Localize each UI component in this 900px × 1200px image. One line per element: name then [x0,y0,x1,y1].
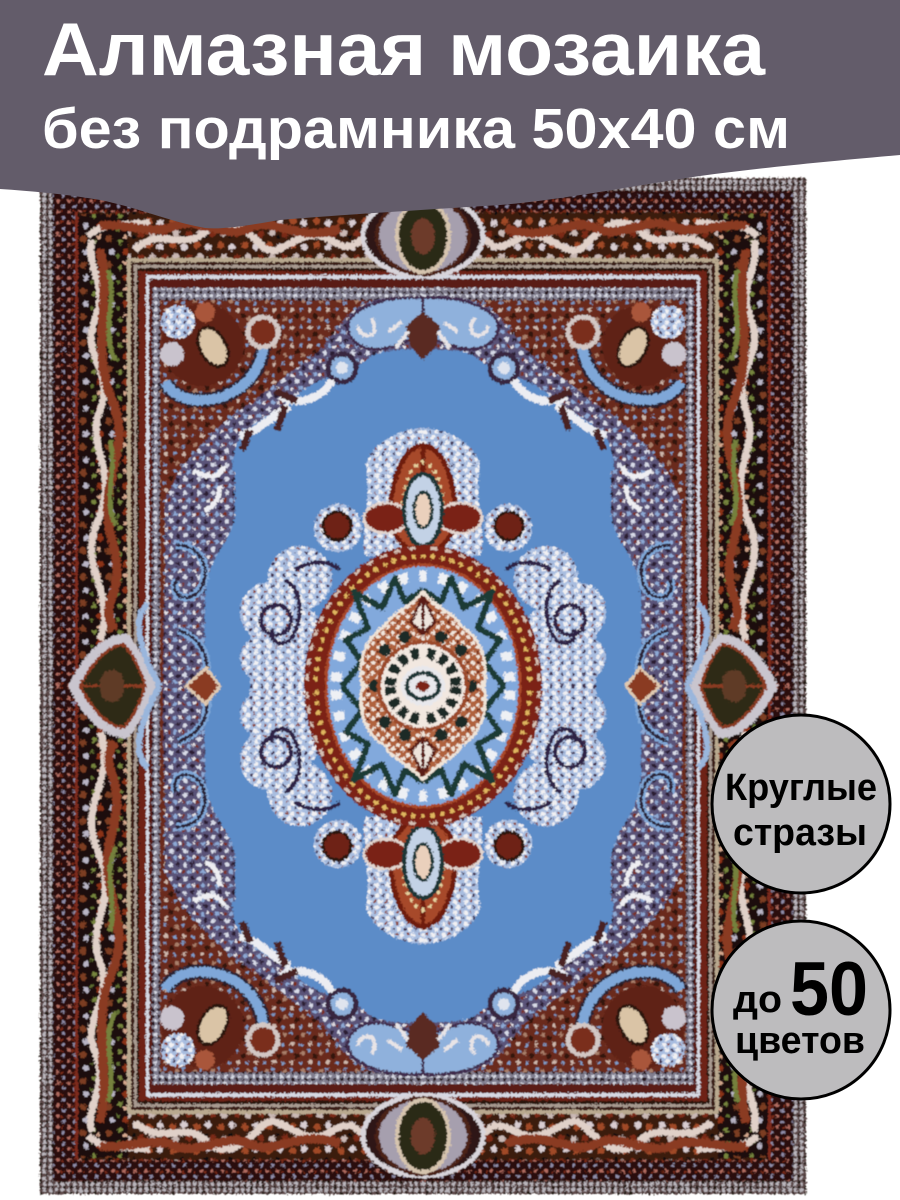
title: Алмазная мозаика [42,7,766,91]
subtitle: без подрамника 50х40 см [42,97,790,161]
badge: up to 50 colours: 50 [790,947,868,1032]
carpet image [40,178,806,1194]
badge: up to 50 colours: цветов [735,1020,865,1062]
carpet: top-left quadrant [40,178,719,1114]
header banner [0,0,900,228]
carpet: bottom-right quadrant [127,258,806,1194]
badge: round rhinestones: стразы [733,812,867,854]
carpet: bottom-left quadrant [40,258,719,1194]
badge: round rhinestones: Круглые [725,767,877,809]
badge: up to 50 colours: до [733,979,782,1021]
badge: up to 50 colours [712,921,890,1099]
carpet: top-right quadrant [127,178,806,1114]
badge: round rhinestones [712,715,890,893]
